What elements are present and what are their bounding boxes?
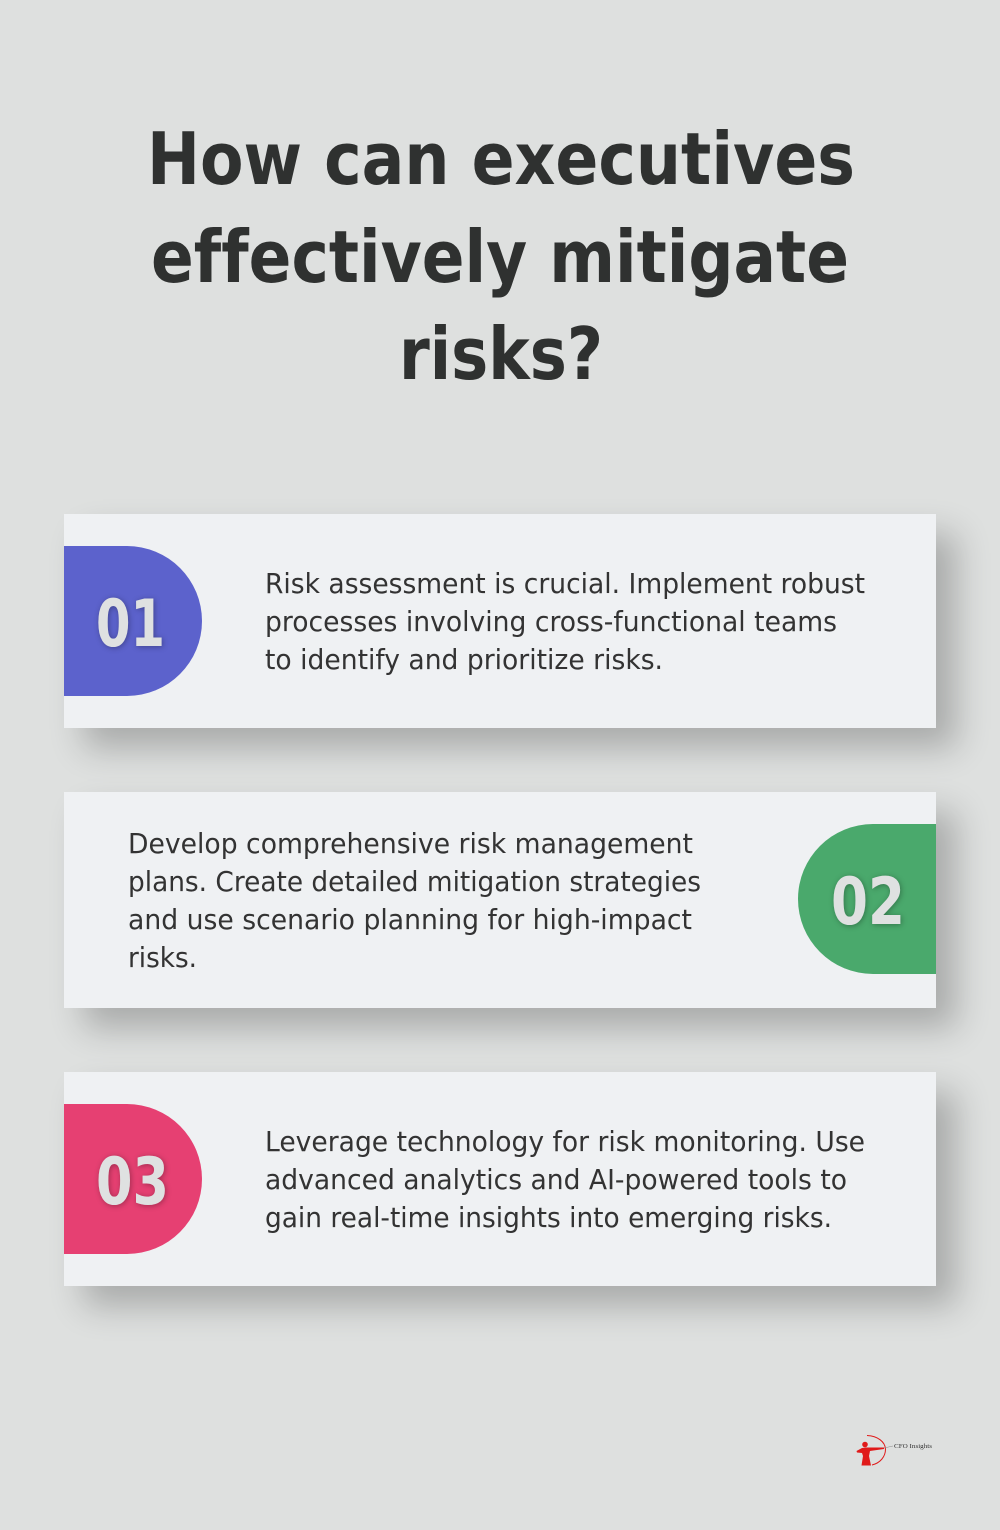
- title: [147, 117, 855, 396]
- text: technology monitoring: Leverage technology for risk monitoring. Use: [265, 1125, 865, 1158]
- title: How can executives: [147, 117, 855, 201]
- text: risk management plans: and use scenario planning for high-impact: [128, 903, 692, 936]
- text: risk management plans: plans. Create detailed mitigation strategies: [128, 865, 701, 898]
- title: risks?: [399, 312, 603, 396]
- title: effectively mitigate: [151, 215, 849, 299]
- text: technology monitoring: advanced analytics and AI-powered tools to: [265, 1163, 847, 1196]
- text: risk assessment: Risk assessment is crucial. Implement robust: [265, 567, 865, 600]
- badge: 01: [64, 546, 202, 696]
- text: risk management plans: Develop comprehensive risk management: [128, 827, 693, 860]
- logo: CFO Insights: [856, 1435, 933, 1466]
- panel: step 01: [64, 514, 936, 728]
- panel: step 03: [64, 1072, 936, 1286]
- number: 02: 02: [831, 865, 905, 940]
- number: 01: 01: [96, 587, 165, 662]
- text: risk assessment: to identify and prioritize risks.: [265, 643, 663, 676]
- badge: 03: [64, 1104, 202, 1254]
- text: risk management plans: [128, 827, 701, 974]
- text: technology monitoring: [265, 1125, 865, 1234]
- text: risk assessment: [265, 567, 865, 676]
- text: technology monitoring: gain real-time insights into emerging risks.: [265, 1201, 832, 1234]
- panel: step 02: [64, 792, 936, 1008]
- badge: 02: [798, 824, 936, 974]
- number: 03: 03: [96, 1145, 169, 1220]
- text: risk management plans: risks.: [128, 941, 197, 974]
- text: risk assessment: processes involving cross-functional teams: [265, 605, 837, 638]
- logo: CFO Insights: CFO Insights: [894, 1443, 933, 1450]
- icon: archer: [856, 1436, 893, 1466]
